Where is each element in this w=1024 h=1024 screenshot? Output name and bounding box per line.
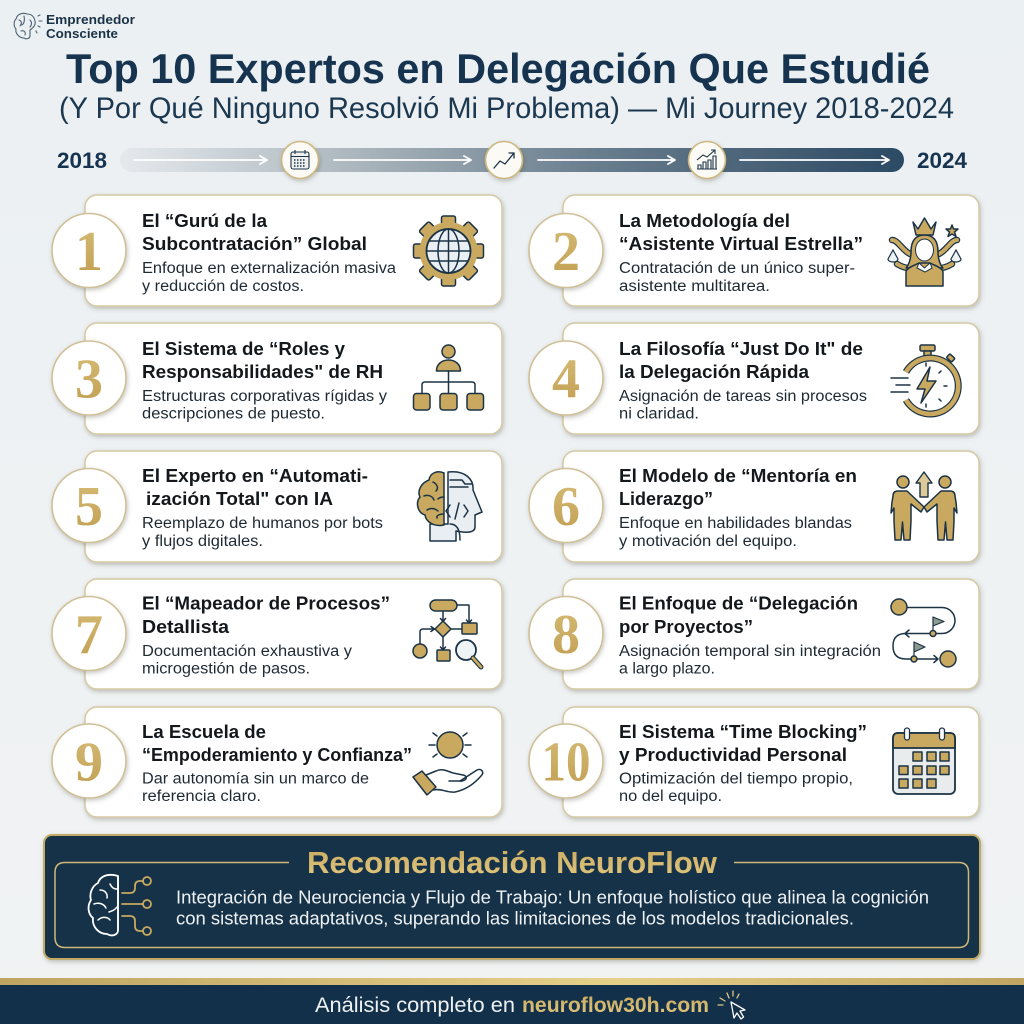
heading: [142, 465, 368, 509]
heading: El Sistema “Time Blocking”: [619, 721, 867, 742]
card box: [85, 579, 502, 689]
description: y flujos digitales.: [142, 533, 263, 550]
heading: por Proyectos”: [619, 616, 753, 637]
description: Asignación temporal sin integración: [619, 643, 881, 660]
number badge 3: [52, 341, 126, 415]
description: Dar autonomía sin un marco de: [142, 770, 369, 788]
card 2: [529, 195, 979, 306]
heading: “Asistente Virtual Estrella”: [619, 233, 863, 254]
icon: process flowchart with magnifier: [413, 600, 481, 667]
heading: El Sistema de “Roles y: [142, 338, 346, 359]
number badge 5: 5: [75, 476, 103, 538]
subtitle: (Y Por Qué Ninguno Resolvió Mi Problema) — Mi Journey 2018-2024: [59, 92, 954, 125]
heading: Subcontratación” Global: [142, 233, 367, 254]
number badge 1: 1: [75, 221, 103, 283]
description: [619, 388, 867, 422]
card box: [85, 323, 502, 434]
heading: La Filosofía “Just Do It" de: [619, 338, 863, 359]
description: [142, 388, 387, 422]
heading: La Metodología del: [619, 210, 790, 231]
number badge 10: [529, 724, 603, 798]
number badge 5: [52, 468, 126, 542]
description: microgestión de pasos.: [142, 660, 310, 678]
footer gold strip: [0, 978, 1024, 985]
card box: [563, 323, 979, 434]
heading: Liderazgo”: [619, 488, 713, 509]
heading: El Modelo de “Mentoría en: [619, 465, 857, 486]
heading: [619, 338, 863, 382]
description: y reducción de costos.: [142, 278, 304, 295]
description: [142, 643, 352, 678]
number badge 6: 6: [552, 476, 580, 538]
card box: [563, 195, 979, 306]
number badge 4: [529, 341, 603, 415]
heading: ización Total" con IA: [146, 488, 333, 509]
card 5: [52, 451, 502, 562]
card 9: [52, 707, 502, 817]
description: referencia claro.: [142, 788, 261, 805]
number badge 9: [52, 724, 126, 798]
card box: [85, 195, 502, 306]
panel body text: [176, 888, 929, 928]
heading: Detallista: [142, 616, 230, 637]
card box: [563, 579, 979, 689]
timeline bar: [120, 148, 904, 172]
panel body text: con sistemas adaptativos, superando las limitaciones de los modelos tradicionales.: [176, 908, 854, 928]
heading: “Empoderamiento y Confianza”: [142, 744, 412, 765]
heading: [619, 210, 863, 254]
card box: [563, 451, 979, 562]
heading: [142, 592, 390, 637]
footer: [0, 978, 1024, 1024]
label 2024: 2024: [917, 148, 968, 173]
inner gold frame: [55, 862, 968, 948]
description: ni claridad.: [619, 406, 699, 422]
icon: brain bulb: [14, 13, 42, 39]
description: Contratación de un único super-: [619, 260, 855, 277]
number badge 3: 3: [75, 348, 103, 410]
timeline arrows: [134, 156, 889, 164]
description: Asignación de tareas sin procesos: [619, 388, 867, 405]
description: no del equipo.: [619, 788, 722, 805]
icon: calendar milestone: [282, 142, 318, 178]
panel background: [44, 835, 980, 959]
number badge 10: 10: [542, 732, 590, 794]
description: Enfoque en habilidades blandas: [619, 515, 852, 532]
description: Optimización del tiempo propio,: [619, 770, 853, 788]
heading: [142, 210, 367, 254]
card box: [85, 451, 502, 562]
heading: la Delegación Rápida: [619, 361, 810, 382]
description: [619, 260, 855, 295]
heading: [619, 465, 857, 509]
icon: multitasking assistant with crown: [888, 218, 961, 286]
footer link: neuroflow30h.com: [522, 994, 709, 1017]
card 10: [529, 707, 979, 817]
description: [619, 770, 853, 805]
number badge 2: [529, 214, 603, 288]
description: Documentación exhaustiva y: [142, 643, 352, 660]
description: [619, 643, 881, 678]
card box: [563, 707, 979, 817]
panel body text: Integración de Neurociencia y Flujo de Trabajo: Un enfoque holístico que alinea la cognición: [176, 888, 929, 908]
card 1: [52, 195, 502, 306]
description: asistente multitarea.: [619, 278, 770, 295]
logo: Emprendedor Consciente: Consciente: [46, 27, 118, 41]
card box: [85, 707, 502, 817]
description: Enfoque en externalización masiva: [142, 260, 396, 277]
heading: y Productividad Personal: [619, 744, 847, 765]
description: [142, 260, 396, 295]
logo: Emprendedor Consciente: Emprendedor: [46, 13, 135, 27]
heading: El Enfoque de “Delegación: [619, 592, 858, 614]
card 6: [529, 451, 979, 562]
description: [142, 515, 383, 550]
number badge 9: 9: [75, 732, 103, 794]
number badge 8: 8: [552, 604, 580, 666]
description: y motivación del equipo.: [619, 533, 797, 550]
card 3: [52, 323, 502, 434]
heading: La Escuela de: [142, 721, 266, 742]
description: [142, 770, 369, 805]
card 7: [52, 579, 502, 689]
heading: El “Gurú de la: [142, 210, 268, 231]
heading: [142, 338, 383, 382]
icon: route with flags: [891, 599, 956, 667]
icon: hand holding sun: [413, 732, 483, 795]
label 2018: 2018: [57, 148, 107, 173]
icon: click cursor: [718, 991, 745, 1019]
icon: two people shaking hands with arrow: [891, 472, 957, 540]
heading: Responsabilidades" de RH: [142, 361, 383, 382]
number badge 2: 2: [552, 221, 580, 283]
card 8: [529, 579, 979, 689]
number badge 1: [52, 214, 126, 288]
icon: calendar grid: [893, 728, 955, 794]
heading: [142, 721, 412, 765]
description: a largo plazo.: [619, 660, 715, 678]
icon: trend line milestone: [486, 142, 522, 178]
number badge 6: [529, 468, 603, 542]
heading: El “Mapeador de Procesos”: [142, 592, 390, 614]
icon: brain with circuit nodes: [89, 875, 151, 935]
panel: Recomendación NeuroFlow: [44, 835, 980, 959]
icon: gear with globe: [414, 216, 484, 286]
number badge 4: 4: [552, 348, 580, 410]
icon: half brain half digital head: [418, 472, 482, 541]
icon: stopwatch with lightning: [891, 345, 958, 414]
icon: bar chart milestone: [688, 142, 726, 178]
panel heading: Recomendación NeuroFlow: [307, 845, 718, 880]
icon: org chart: [414, 345, 484, 410]
footer text: Análisis completo en: [315, 994, 515, 1017]
title: Top 10 Expertos en Delegación Que Estudié: [66, 45, 930, 92]
number badge 8: [529, 596, 603, 670]
description: descripciones de puesto.: [142, 406, 325, 422]
heading: El Experto en “Automati-: [142, 465, 368, 486]
description: Reemplazo de humanos por bots: [142, 515, 383, 532]
card 4: [529, 323, 979, 434]
heading: [619, 592, 858, 637]
heading: [619, 721, 867, 765]
logo: Emprendedor Consciente: [14, 13, 135, 41]
description: Estructuras corporativas rígidas y: [142, 388, 387, 405]
timeline 2018-2024: [57, 142, 968, 178]
description: [619, 515, 852, 550]
footer band: [0, 985, 1024, 1024]
number badge 7: 7: [75, 604, 103, 666]
number badge 7: [52, 596, 126, 670]
